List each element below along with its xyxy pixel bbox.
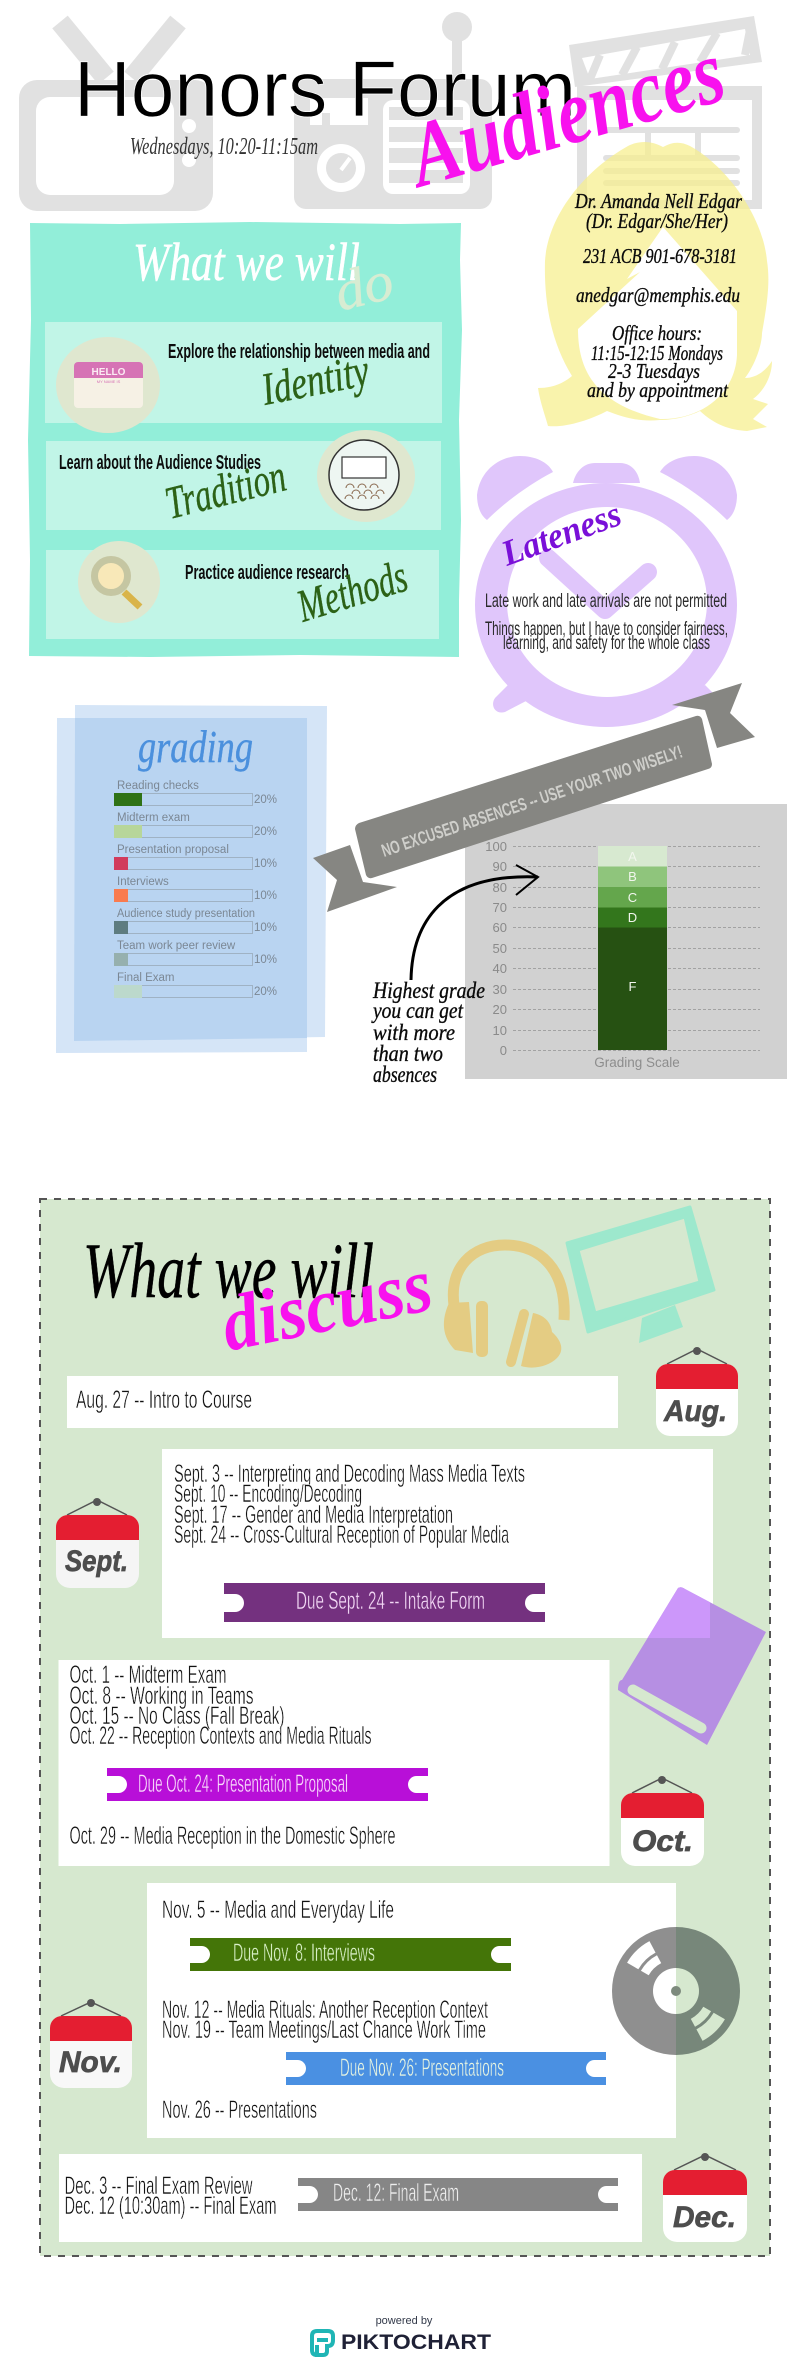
schedule: August	[67, 1376, 618, 1428]
decoration: yellow hair shape	[538, 142, 772, 431]
icon: monitor	[567, 1207, 714, 1343]
chart: grading scale: 50	[493, 941, 507, 956]
schedule: October	[58, 1660, 610, 1866]
schedule: December: Dec. 12 (10:30am) -- Final Exam	[64, 2192, 276, 2220]
text: practice: Practice audience research	[185, 562, 349, 584]
keyword: Identity: Identity	[256, 344, 373, 415]
schedule: October: Oct. 1 -- Midterm Exam	[70, 1661, 226, 1689]
schedule: September	[162, 1449, 713, 1638]
wordmark: PIKTOCHART	[341, 2331, 491, 2354]
chart: grading scale: 0	[500, 1043, 507, 1058]
bar: Audience study presentation: Audience study presentation	[117, 908, 255, 920]
calendar: Oct.	[621, 1776, 704, 1866]
ticket: final exam	[278, 2178, 638, 2211]
schedule: August: Aug. 27 -- Intro to Course	[76, 1386, 252, 1414]
callout: highest grade	[371, 978, 485, 1087]
ticket: interviews: Due Nov. 8: Interviews	[233, 1939, 375, 1967]
callout: highest grade: you can get	[371, 998, 464, 1023]
chart: grading scale: 90	[493, 859, 507, 874]
title: Audiences: Audiences	[393, 19, 735, 207]
schedule: September: Sept. 17 -- Gender and Media Interpretation	[174, 1501, 453, 1529]
bar: Reading checks: 20%	[254, 794, 277, 806]
schedule: October: Oct. 22 -- Reception Contexts and Media Rituals	[70, 1722, 372, 1750]
schedule: December: Dec. 3 -- Final Exam Review	[64, 2172, 253, 2200]
icon: clapperboard	[569, 16, 762, 209]
schedule: November	[147, 1883, 676, 2138]
schedule: September: Sept. 24 -- Cross-Cultural Reception of Popular Media	[174, 1521, 509, 1549]
bar: Presentation proposal: Presentation proposal	[117, 844, 229, 856]
instructor name: Dr. Amanda Nell Edgar	[574, 189, 743, 213]
email: anedgar@memphis.edu	[576, 283, 740, 307]
icon: audience in front of a screen	[317, 430, 415, 522]
icon: vinyl record	[612, 1927, 740, 2055]
subtitle: class time: Wednesdays, 10:20-11:15am	[130, 134, 318, 160]
callout: highest grade: with more	[373, 1020, 455, 1045]
office and phone: 231 ACB 901-678-3181	[583, 244, 737, 268]
bar: Audience study presentation	[114, 908, 277, 934]
bar: Interviews: Interviews	[117, 876, 169, 888]
office hours heading: Office hours:	[612, 321, 702, 345]
ticket: interviews	[170, 1938, 531, 1971]
ticket: final exam: Dec. 12: Final Exam	[333, 2179, 459, 2207]
schedule: October: Oct. 15 -- No Class (Fall Break)	[70, 1702, 284, 1730]
callout: highest grade: Highest grade	[372, 978, 485, 1003]
bar: Reading checks: Reading checks	[117, 780, 199, 792]
contact block	[574, 189, 743, 402]
calendar: Nov.	[50, 1999, 132, 2088]
calendar: Dec.: Dec.	[673, 2201, 736, 2234]
chart: grading scale: 40	[493, 961, 507, 976]
bar: Midterm exam: 20%	[254, 826, 277, 838]
bar: Final Exam	[114, 972, 277, 998]
row: methods	[46, 541, 439, 639]
bar: Interviews: 10%	[254, 890, 277, 902]
icon: television	[19, 22, 213, 211]
logo mark	[312, 2331, 333, 2355]
schedule: October: Oct. 29 -- Media Reception in the Domestic Sphere	[70, 1822, 395, 1850]
keyword: Methods: Methods	[290, 550, 413, 632]
schedule: November: Nov. 26 -- Presentations	[162, 2096, 317, 2124]
heading: What we will: What we will	[83, 1227, 374, 1314]
icon: name tag: MY NAME IS	[97, 379, 121, 384]
heading: do: do	[328, 249, 399, 324]
icon: radio	[294, 12, 492, 209]
panel: grading	[56, 705, 327, 1053]
row: identity	[45, 322, 442, 433]
schedule: September: Sept. 10 -- Encoding/Decoding	[174, 1480, 362, 1508]
schedule: September: Sept. 3 -- Interpreting and Decoding Mass Media Texts	[174, 1460, 525, 1488]
ticket: presentation proposal	[87, 1768, 448, 1801]
calendar: Aug.	[656, 1347, 738, 1436]
bar: Midterm exam	[114, 812, 277, 838]
arrow: to grade 80	[411, 865, 538, 980]
background icons: media devices	[19, 12, 762, 211]
heading: discuss: discuss	[214, 1240, 439, 1368]
icon: alarm clock	[475, 456, 737, 727]
calendar: Oct.: Oct.	[632, 1825, 693, 1858]
bar: Team work peer review: Team work peer review	[117, 940, 236, 952]
chart: grading scale	[465, 804, 787, 1079]
chart: grading scale: 30	[493, 982, 507, 997]
calendar: Dec.	[663, 2153, 747, 2242]
bar: Final Exam: Final Exam	[117, 972, 175, 984]
text: lateness policy	[485, 591, 728, 654]
bar: Audience study presentation: 10%	[254, 922, 277, 934]
title: Honors Forum: Honors Forum	[74, 44, 576, 133]
chart: grading scale: 70	[493, 900, 507, 915]
office hours appointment: and by appointment	[587, 378, 729, 402]
schedule: November: Nov. 5 -- Media and Everyday Life	[162, 1896, 394, 1924]
bar: Presentation proposal: 10%	[254, 858, 277, 870]
bar: Team work peer review: 10%	[254, 954, 277, 966]
callout: highest grade: absences	[373, 1062, 437, 1087]
footer: powered by Piktochart	[312, 2315, 491, 2355]
schedule: November: Nov. 19 -- Team Meetings/Last Chance Work Time	[162, 2016, 486, 2044]
office hours Monday: 11:15-12:15 Mondays	[591, 341, 723, 365]
stacked bar	[598, 846, 667, 1050]
chart: grading scale: 100	[485, 839, 507, 854]
stacked bar: C	[628, 890, 637, 905]
bar: Presentation proposal	[114, 844, 277, 870]
ticket: presentations: Due Nov. 26: Presentations	[340, 2054, 504, 2082]
row: tradition	[46, 430, 441, 530]
bar: Interviews	[114, 876, 277, 902]
stacked bar: F	[629, 979, 637, 994]
icon: headphones	[444, 1245, 564, 1368]
calendar: Sept.	[56, 1498, 139, 1588]
schedule: November: Nov. 12 -- Media Rituals: Another Reception Context	[162, 1996, 488, 2024]
heading: Lateness: Lateness	[495, 494, 626, 574]
bar: Team work peer review	[114, 940, 277, 966]
stacked bar: A	[628, 849, 637, 864]
text: learn: Learn about the Audience Studies	[59, 452, 261, 474]
chart: grading scale: 80	[493, 880, 507, 895]
keyword: Tradition: Tradition	[160, 450, 291, 529]
chart: grading scale: 20	[493, 1002, 507, 1017]
calendar: Sept.: Sept.	[65, 1545, 128, 1578]
ticket: presentation proposal: Due Oct. 24: Presentation Proposal	[138, 1770, 348, 1798]
ticket: intake form: Due Sept. 24 -- Intake Form	[296, 1587, 485, 1615]
bar: Reading checks	[114, 780, 277, 806]
calendar: Aug.: Aug.	[663, 1395, 727, 1428]
callout: highest grade: than two	[373, 1041, 443, 1066]
icon: magnifying glass	[78, 541, 160, 623]
footer: powered by Piktochart: powered by	[376, 2315, 433, 2327]
heading: grading: grading	[138, 721, 253, 772]
panel: what we will do	[28, 222, 462, 657]
ticket: presentations	[266, 2052, 626, 2085]
heading: What we will: What we will	[133, 232, 360, 292]
text: explore: Explore the relationship between media and	[168, 341, 430, 363]
ribbon: no excused absences	[313, 683, 755, 912]
icon: name tag	[56, 337, 160, 433]
instructor pronouns: (Dr. Edgar/She/Her)	[586, 209, 728, 233]
chart: grading scale: 10	[493, 1023, 507, 1038]
schedule: October: Oct. 8 -- Working in Teams	[70, 1682, 254, 1710]
calendar: Nov.: Nov.	[59, 2046, 122, 2079]
bar: Final Exam: 20%	[254, 986, 277, 998]
schedule: December	[59, 2154, 642, 2242]
bar: Midterm exam: Midterm exam	[117, 812, 190, 824]
icon: book	[618, 1587, 766, 1745]
panel: what we will discuss	[40, 1199, 770, 2256]
icon: name tag: HELLO	[92, 367, 126, 378]
stacked bar: D	[628, 910, 637, 925]
ticket: intake form	[204, 1583, 565, 1622]
stacked bar: B	[628, 869, 637, 884]
chart: grading scale: Grading Scale	[594, 1055, 680, 1070]
chart: grading scale: 60	[493, 920, 507, 935]
office hours Tuesday: 2-3 Tuesdays	[608, 359, 700, 383]
